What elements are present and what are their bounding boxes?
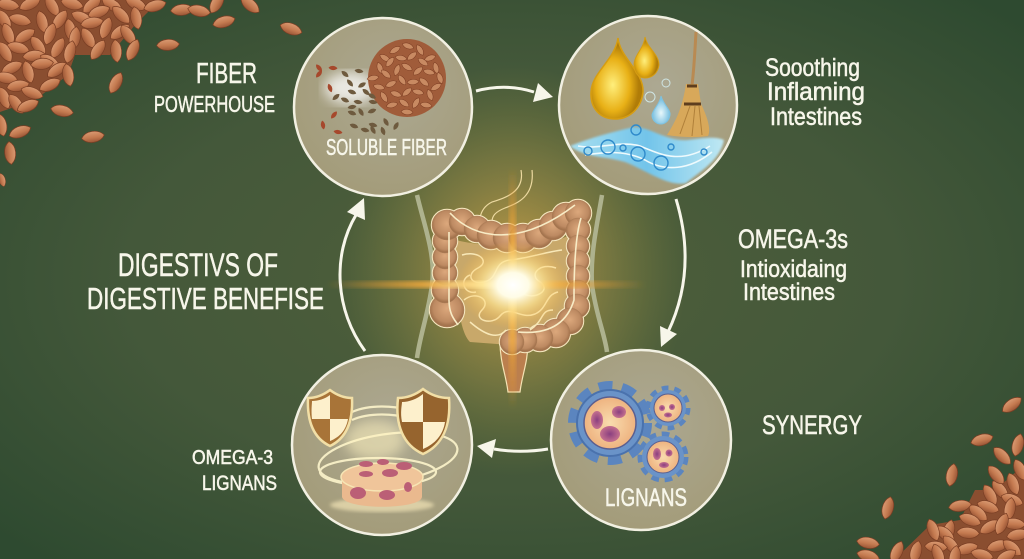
icon: glowing intestines — [430, 170, 591, 392]
icon: small gear upper — [650, 390, 686, 426]
text: omega-3 lignans — [192, 447, 277, 495]
panel: omega oils — [559, 16, 737, 194]
text: omega-3s: OMEGA-3s — [738, 224, 848, 254]
label: SOLUBLE FIBER — [326, 134, 447, 160]
colon highlight lines — [449, 205, 581, 332]
white haze — [324, 72, 376, 104]
colon outline — [430, 200, 591, 354]
icon: water wave — [570, 125, 724, 184]
text: soothing inflaming intestines: Inflaming — [767, 78, 865, 106]
small intestine — [455, 235, 570, 345]
label: LIGNANS — [605, 484, 687, 512]
arrow: oils to lignans — [660, 199, 685, 347]
colon fill — [430, 200, 591, 354]
heading: digestive benefits — [87, 247, 324, 316]
icon: left shield — [308, 390, 352, 446]
heading: digestive benefits: DIGESTIVS OF — [118, 247, 278, 283]
text: omega-3s — [738, 224, 848, 306]
arrow: lignans to shields — [477, 439, 548, 458]
text: soothing inflaming intestines: Intestines — [770, 103, 862, 131]
heading: synergy: SYNERGY — [762, 410, 862, 440]
text: soothing inflaming intestines: Sooothing — [765, 54, 860, 82]
central glow — [338, 65, 688, 475]
heading: fiber powerhouse: FIBER — [196, 58, 257, 90]
arrow: fiber to oils — [476, 83, 553, 102]
intestine coils — [462, 250, 562, 335]
flax seeds: bottom-right corner — [855, 394, 1024, 559]
text: soothing inflaming intestines — [765, 54, 865, 131]
panel: lignans — [551, 350, 731, 530]
icon: right shield — [397, 389, 449, 454]
panel: protection shields — [292, 355, 472, 535]
icon: flaxseed ball — [367, 39, 446, 117]
icon: large gear — [575, 388, 645, 458]
panel: soluble fiber — [294, 18, 472, 196]
icon: small gear lower — [642, 436, 684, 478]
icon: broom — [667, 32, 709, 137]
heading: fiber powerhouse: POWERHOUSE — [154, 91, 275, 117]
text: omega-3 lignans: LIGNANS — [202, 472, 277, 495]
icon: cell dish — [330, 459, 434, 512]
body silhouette lines — [417, 195, 607, 358]
text: omega-3s: Intioxidaing — [740, 256, 847, 283]
sparkles — [345, 420, 405, 460]
light flare — [326, 168, 646, 408]
esophagus lines — [480, 170, 532, 222]
arrow: shields to fiber — [340, 198, 365, 351]
scattered seeds — [314, 63, 400, 136]
heading: digestive benefits: DIGESTIVE BENEFISE — [87, 281, 324, 316]
swirl — [315, 406, 461, 492]
flax seeds: top-left corner — [0, 0, 304, 188]
text: omega-3 lignans: OMEGA-3 — [192, 447, 273, 469]
text: omega-3s: Intestines — [743, 279, 835, 306]
rectum — [500, 342, 528, 392]
heading: fiber powerhouse — [154, 58, 275, 117]
icon: oil drops — [591, 37, 670, 124]
